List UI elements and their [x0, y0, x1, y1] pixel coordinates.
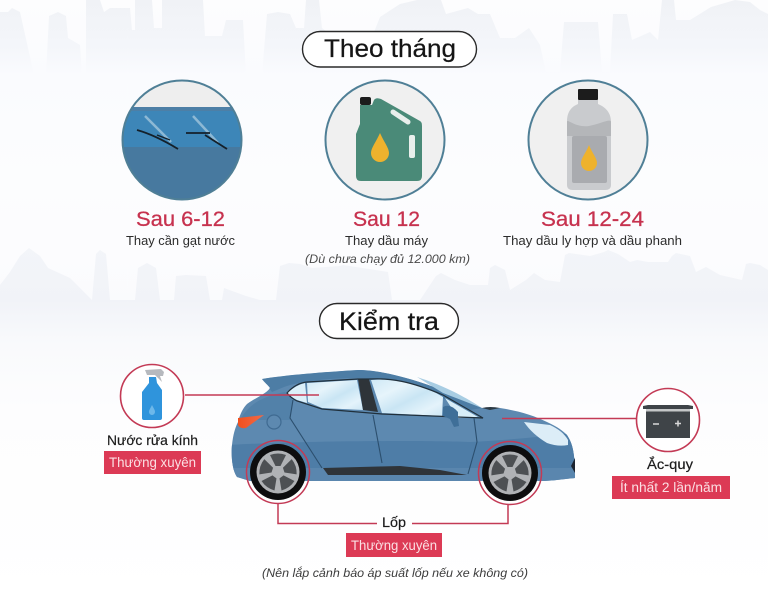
- panel: engine oil: [305, 80, 470, 266]
- callout: tyres: [262, 514, 528, 580]
- skyline background middle: [0, 248, 768, 345]
- heading: Kiểm tra: Kiểm tra: [339, 308, 439, 336]
- text: Thay dầu máy: Thay dầu máy: [345, 234, 429, 248]
- panel: wipers: [118, 80, 248, 248]
- note: tyre pressure warning: (Nên lắp cảnh báo áp suất lốp nếu xe không có): [262, 567, 528, 580]
- badge: Ít nhất 2 lần/năm: Ít nhất 2 lần/năm: [620, 480, 722, 495]
- badge: Thường xuyên: Thường xuyên: [351, 538, 437, 553]
- skyline background top: [0, 0, 768, 75]
- leader lines: [185, 395, 637, 524]
- label: Sau 6-12: Sau 6-12: [136, 207, 225, 231]
- icon: windshield wipers: [122, 80, 242, 200]
- heading: Theo tháng: Theo tháng: [324, 35, 456, 63]
- text: Thay cần gạt nước: Thay cần gạt nước: [126, 234, 235, 248]
- label: Lốp: Lốp: [382, 514, 406, 530]
- icon: brake fluid bottle: [528, 80, 648, 200]
- label: Ắc-quy: Ắc-quy: [647, 455, 693, 472]
- icon: spray bottle: [120, 364, 184, 428]
- heading: Kiểm tra: [320, 304, 458, 338]
- note: Dù chưa chạy đủ: (Dù chưa chạy đủ 12.000 km): [305, 254, 470, 266]
- callout: battery: [612, 388, 730, 499]
- text: Thay dầu ly hợp và dầu phanh: Thay dầu ly hợp và dầu phanh: [503, 234, 682, 248]
- badge: Thường xuyên: [346, 533, 442, 557]
- icon: oil canister: [326, 80, 444, 200]
- label: Sau 12-24: Sau 12-24: [541, 207, 644, 231]
- car illustration: [228, 370, 580, 501]
- panel: brake fluid: [503, 80, 682, 248]
- icon: battery: [636, 388, 700, 452]
- label: Nước rửa kính: Nước rửa kính: [107, 432, 198, 448]
- label: Sau 12: Sau 12: [353, 207, 420, 231]
- heading: Theo tháng: [302, 32, 476, 67]
- badge: Thường xuyên: Thường xuyên: [109, 455, 196, 470]
- callout: washer fluid: [104, 364, 201, 474]
